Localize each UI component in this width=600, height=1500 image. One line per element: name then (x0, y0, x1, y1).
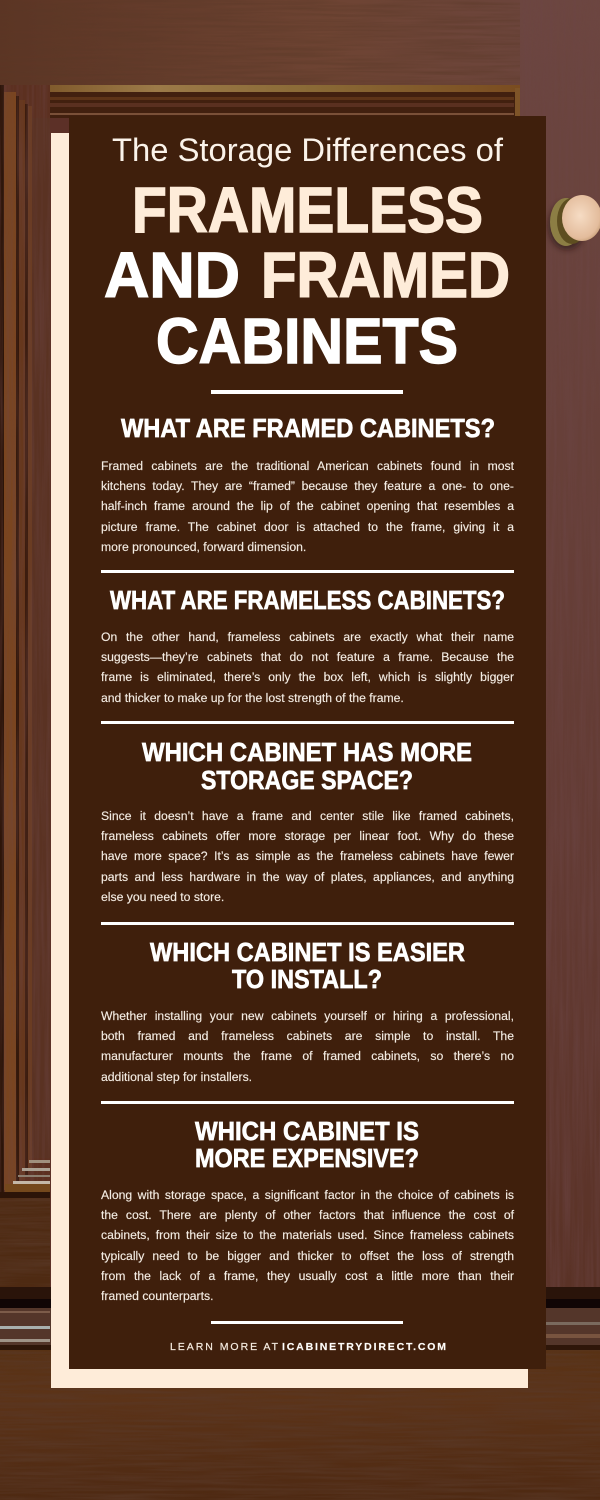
body text: framed cabinets: more pronounced, forward dimension. (101, 540, 306, 554)
cream offset panel (51, 133, 528, 1388)
body text: storage space: else you need to store. (101, 890, 224, 904)
body text: frameless cabinets: frame is eliminated, there’s only the box left, which is slightly bigger (101, 670, 514, 684)
title (104, 132, 510, 377)
body text: cost: Along with storage space, a significant factor in the choice of cabinets is (101, 1188, 514, 1202)
body text: storage space: frameless cabinets offer more storage per linear foot. Why do these (101, 829, 514, 843)
main brown panel (69, 116, 546, 1369)
heading: which cabinet has more storage space: WHICH CABINET HAS MORE (142, 737, 472, 767)
footer divider (211, 1321, 403, 1324)
divider (101, 922, 514, 925)
divider (101, 1101, 514, 1104)
heading: which cabinet is easier to install: WHICH CABINET IS EASIER (150, 937, 465, 967)
body text: storage space: have more space? It’s as simple as the frameless cabinets have fewer (101, 849, 514, 863)
footer call to action: ICABINETRYDIRECT.COM (282, 1341, 446, 1353)
body text: framed cabinets: picture frame. The cabinet door is attached to the frame, giving it a (101, 520, 514, 534)
footer call to action: LEARN MORE AT (170, 1341, 279, 1353)
divider (101, 570, 514, 573)
body text: installation: Whether installing your new cabinets yourself or hiring a professional, (101, 1009, 514, 1023)
heading: which cabinet is more expensive: MORE EXPENSIVE? (195, 1143, 419, 1173)
body text: framed cabinets: kitchens today. They are “framed” because they feature a one- to one- (101, 479, 514, 493)
heading: what are frameless cabinets: WHAT ARE FRAMELESS CABINETS? (110, 585, 505, 615)
body text: installation: both framed and frameless cabinets are simple to install. The (101, 1029, 514, 1043)
body text: installation: additional step for installers. (101, 1070, 252, 1084)
title: FRAMELESS (132, 174, 483, 246)
title: FRAMED (261, 239, 510, 311)
body text: storage space (101, 809, 514, 904)
title: CABINETS (156, 305, 458, 377)
title divider (211, 390, 403, 394)
body text: cost (100, 1188, 514, 1303)
body text: framed cabinets: Framed cabinets are the traditional American cabinets found in most (101, 459, 514, 473)
title: The Storage Differences of (112, 132, 503, 168)
body text: framed cabinets: half-inch frame around the lip of the cabinet opening that resembles a (101, 499, 514, 513)
body text: frameless cabinets: and thicker to make up for the lost strength of the frame. (101, 691, 404, 705)
body text: cost: framed counterparts. (101, 1289, 213, 1303)
body text: cost: the cost. There are plenty of other factors that influence the cost of (101, 1208, 514, 1222)
body text: cost: cabinets, from their size to the materials used. Since frameless cabinets (101, 1228, 514, 1242)
heading: which cabinet is more expensive: WHICH CABINET IS (195, 1116, 419, 1146)
body text: cost: typically need to be bigger and thicker to offset the loss of strength (101, 1249, 514, 1263)
body text: frameless cabinets (101, 630, 514, 705)
title: AND (104, 239, 240, 311)
divider (101, 721, 514, 724)
body text: storage space: parts and less hardware in the way of plates, appliances, and anything (101, 870, 514, 884)
body text: framed cabinets (101, 459, 514, 554)
heading: which cabinet is easier to install: TO INSTALL? (232, 964, 382, 994)
body text: installation: manufacturer mounts the frame of framed cabinets, so there’s no (101, 1049, 514, 1063)
body text: frameless cabinets: suggests—they’re cabinets that do not feature a frame. Because the (101, 650, 514, 664)
heading: what are framed cabinets: WHAT ARE FRAMED CABINETS? (121, 413, 495, 443)
body text: cost: from the lack of a frame, they usually cost a little more than their (101, 1269, 514, 1283)
body text: storage space: Since it doesn’t have a frame and center stile like framed cabinets, (101, 809, 514, 823)
body text: installation (101, 1009, 514, 1084)
body text: frameless cabinets: On the other hand, frameless cabinets are exactly what their name (101, 630, 514, 644)
icon: cabinet knob (548, 195, 600, 250)
heading: which cabinet has more storage space: STORAGE SPACE? (201, 765, 413, 795)
